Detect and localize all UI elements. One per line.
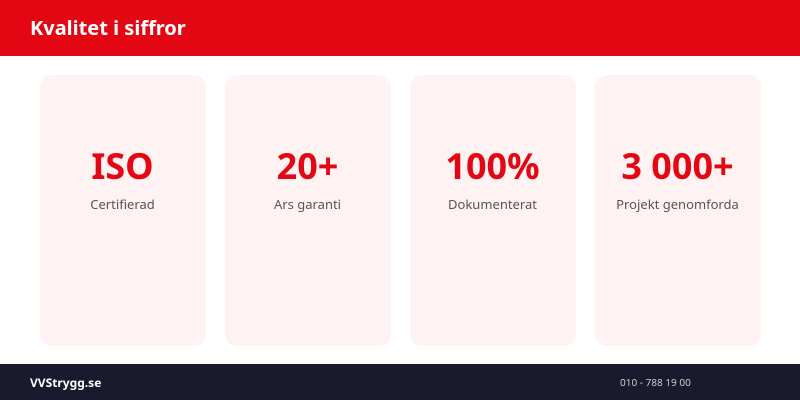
footer brand: VVStrygg.se xyxy=(30,374,101,391)
header band xyxy=(0,0,800,56)
footer phone number: 010 - 788 19 00 xyxy=(620,375,691,389)
panel: ISO xyxy=(40,75,206,346)
stat label: Ars garanti: Ars garanti xyxy=(274,195,341,213)
panel: documented xyxy=(410,75,576,346)
stat value: ISO: ISO xyxy=(91,141,154,190)
stat value: 3 000+: 3 000+ xyxy=(621,141,734,190)
title: Kvalitet i siffror xyxy=(30,14,186,41)
stat label: Projekt genomforda: Projekt genomforda xyxy=(616,195,739,213)
stat label: Certifierad: Certifierad xyxy=(90,195,155,213)
stat value: 100%: 100% xyxy=(445,141,540,190)
stat value: 20+: 20+ xyxy=(277,141,338,190)
footer band xyxy=(0,364,800,400)
stat label: Dokumenterat: Dokumenterat xyxy=(448,195,537,213)
panel: projects xyxy=(595,75,761,346)
panel: warranty xyxy=(225,75,391,346)
